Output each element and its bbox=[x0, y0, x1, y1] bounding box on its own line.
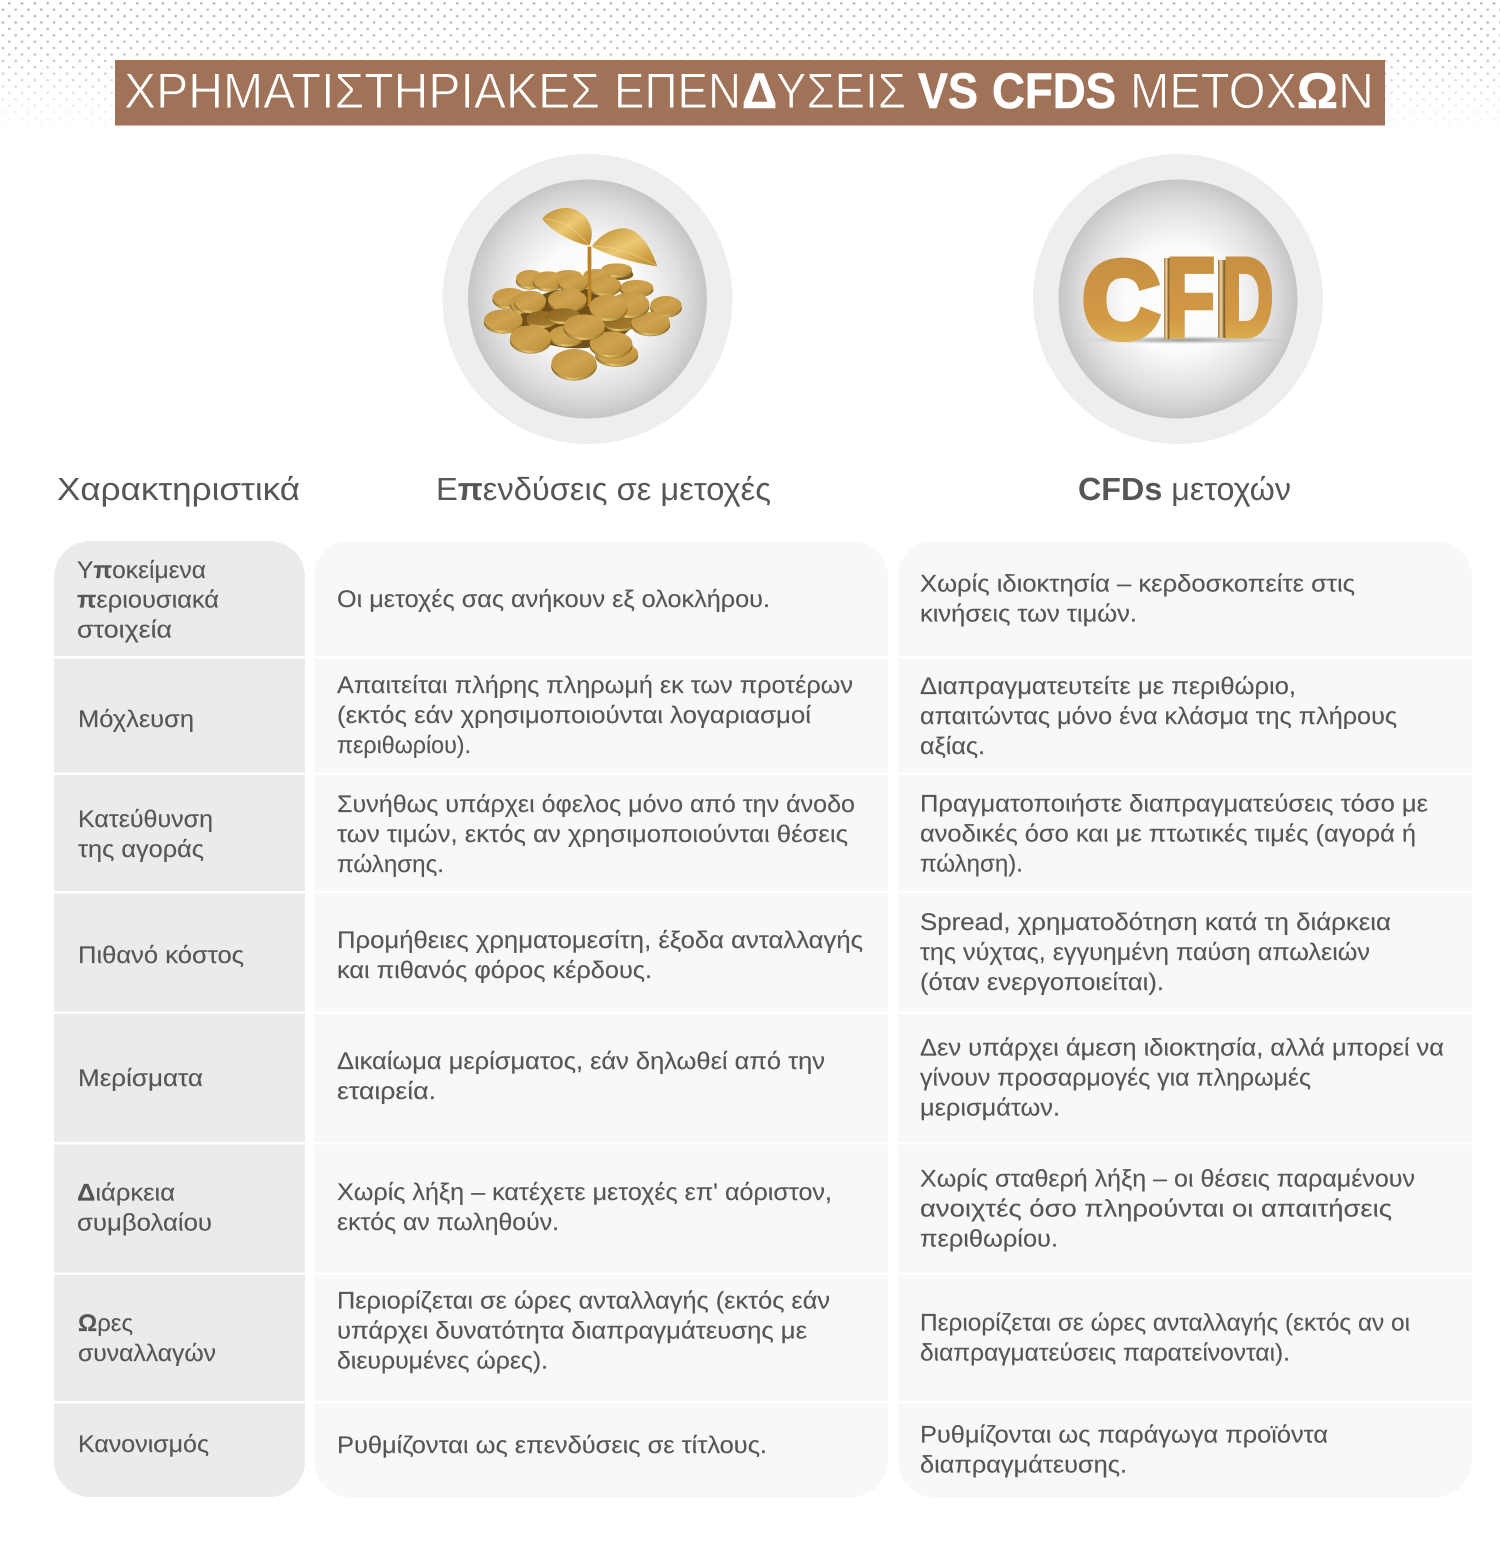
cell: trading hours: Περιορίζεται σε ώρες ανταλλαγής (εκτός εάν bbox=[337, 1288, 830, 1314]
label: trading hours: Ωρες bbox=[78, 1310, 133, 1337]
cell: underlying assets bbox=[920, 570, 1355, 628]
cell: potential cost: της νύχτας, εγγυημένη παύση απωλειών bbox=[920, 939, 1370, 966]
cell: regulation: διαπραγμάτευσης. bbox=[920, 1452, 1127, 1478]
heading: characteristics: Χαρακτηριστικά bbox=[57, 471, 300, 507]
cell: contract duration bbox=[337, 1179, 832, 1236]
label: regulation: Κανονισμός bbox=[78, 1431, 209, 1458]
title banner: Δ bbox=[742, 63, 777, 119]
title banner: Ω bbox=[1297, 63, 1338, 119]
title banner: VS bbox=[918, 63, 978, 119]
label: market direction bbox=[78, 806, 213, 863]
cell: contract duration: εκτός αν πωληθούν. bbox=[337, 1209, 559, 1236]
label: dividends: Μερίσματα bbox=[78, 1065, 203, 1092]
cell: leverage: περιθωρίου). bbox=[337, 732, 471, 759]
label: underlying assets: στοιχεία bbox=[77, 616, 172, 644]
label: leverage: Μόχλευση bbox=[78, 706, 194, 733]
label: market direction: της αγοράς bbox=[78, 836, 204, 863]
label: trading hours bbox=[78, 1310, 216, 1367]
icon: 3D CFD letters: C bbox=[1083, 239, 1159, 360]
cell: dividends bbox=[337, 1048, 825, 1105]
cell: market direction bbox=[920, 790, 1428, 878]
cell: potential cost: και πιθανός φόρος κέρδους. bbox=[337, 957, 652, 984]
title banner: ΕΠΕΝ bbox=[614, 63, 741, 119]
icon: 3D CFD letters bbox=[1033, 154, 1323, 444]
cell: potential cost: (όταν ενεργοποιείται). bbox=[920, 969, 1164, 996]
cell: dividends: μερισμάτων. bbox=[920, 1094, 1060, 1122]
cell: regulation bbox=[920, 1422, 1328, 1478]
title banner: Ν bbox=[1338, 63, 1374, 119]
cell: regulation: Ρυθμίζονται ως επενδύσεις σε τίτλους. bbox=[337, 1432, 767, 1459]
cell: dividends bbox=[920, 1034, 1444, 1122]
title banner: ΥΣΕΙΣ bbox=[776, 63, 906, 119]
cell: contract duration: ανοιχτές όσο πληρούνται οι απαιτήσεις bbox=[920, 1196, 1392, 1222]
cell: trading hours bbox=[920, 1310, 1410, 1366]
title banner: CFDS bbox=[992, 63, 1116, 119]
cell: market direction: Συνήθως υπάρχει όφελος μόνο από την άνοδο bbox=[337, 791, 855, 818]
cell: leverage: αξίας. bbox=[920, 733, 985, 760]
cell: underlying assets: Οι μετοχές σας ανήκουν εξ ολοκλήρου. bbox=[337, 586, 770, 613]
cell: leverage bbox=[920, 673, 1397, 760]
cell: leverage: απαιτώντας μόνο ένα κλάσμα της πλήρους bbox=[920, 703, 1397, 730]
cell: contract duration: περιθωρίου. bbox=[920, 1226, 1058, 1252]
label: potential cost: Πιθανό κόστος bbox=[78, 942, 244, 969]
cell: market direction: ανοδικές όσο και με πτωτικές τιμές (αγορά ή bbox=[920, 820, 1416, 848]
heading: stock CFDs: CFDs μετοχών bbox=[1078, 471, 1291, 507]
panel: stock investments column bbox=[314, 541, 888, 1497]
cell: trading hours: υπάρχει δυνατότητα διαπραγμάτευσης με bbox=[337, 1318, 807, 1344]
cell: dividends: γίνουν προσαρμογές για πληρωμές bbox=[920, 1064, 1311, 1092]
cell: trading hours: Περιορίζεται σε ώρες ανταλλαγής (εκτός αν οι bbox=[920, 1310, 1410, 1336]
cell: contract duration: Χωρίς λήξη – κατέχετε μετοχές επ' αόριστον, bbox=[337, 1179, 832, 1206]
heading: stock investments: Επενδύσεις σε μετοχές bbox=[436, 471, 771, 507]
cell: trading hours: διευρυμένες ώρες). bbox=[337, 1348, 548, 1374]
cell: market direction: πώλησης. bbox=[337, 851, 444, 878]
icon: golden coins with sprout bbox=[442, 154, 732, 444]
cell: market direction: πώληση). bbox=[920, 850, 1023, 878]
cell: regulation: Ρυθμίζονται ως παράγωγα προϊόντα bbox=[920, 1422, 1328, 1448]
cell: potential cost bbox=[337, 927, 863, 984]
label: underlying assets bbox=[77, 557, 219, 644]
title banner: ΧΡΗΜΑΤΙΣΤΗΡΙΑΚΕΣ bbox=[124, 63, 600, 119]
cell: leverage: Απαιτείται πλήρης πληρωμή εκ των προτέρων bbox=[337, 672, 853, 699]
cell: potential cost: Προμήθειες χρηματομεσίτη, έξοδα ανταλλαγής bbox=[337, 927, 863, 954]
label: market direction: Κατεύθυνση bbox=[78, 806, 213, 833]
title banner: ΜΕΤΟΧ bbox=[1130, 63, 1297, 119]
label: contract duration: Διάρκεια bbox=[77, 1180, 175, 1206]
cell: underlying assets: κινήσεις των τιμών. bbox=[920, 600, 1137, 628]
label: trading hours: συναλλαγών bbox=[78, 1340, 216, 1367]
cell: leverage bbox=[337, 672, 853, 759]
label: contract duration: συμβολαίου bbox=[77, 1210, 212, 1236]
cell: potential cost bbox=[920, 909, 1391, 996]
cell: market direction: Πραγματοποιήστε διαπραγματεύσεις τόσο με bbox=[920, 790, 1428, 818]
cell: leverage: Διαπραγματευτείτε με περιθώριο, bbox=[920, 673, 1296, 700]
cell: dividends: Δικαίωμα μερίσματος, εάν δηλωθεί από την bbox=[337, 1048, 825, 1075]
panel: stock CFDs column bbox=[898, 541, 1472, 1497]
icon: 3D CFD letters: D bbox=[1222, 235, 1274, 360]
cell: contract duration: Χωρίς σταθερή λήξη – οι θέσεις παραμένουν bbox=[920, 1166, 1415, 1192]
cell: trading hours bbox=[337, 1288, 830, 1374]
cell: market direction: των τιμών, εκτός αν χρησιμοποιούνται θέσεις bbox=[337, 821, 848, 848]
icon: 3D CFD letters: F bbox=[1166, 235, 1215, 360]
cell: contract duration bbox=[920, 1166, 1415, 1252]
cell: dividends: Δεν υπάρχει άμεση ιδιοκτησία, αλλά μπορεί να bbox=[920, 1034, 1444, 1062]
panel: characteristics column bbox=[54, 541, 305, 1497]
cell: potential cost: Spread, χρηματοδότηση κατά τη διάρκεια bbox=[920, 909, 1391, 936]
label: underlying assets: περιουσιακά bbox=[77, 586, 219, 614]
label: contract duration bbox=[77, 1180, 212, 1236]
cell: leverage: (εκτός εάν χρησιμοποιούνται λογαριασμοί bbox=[337, 702, 812, 729]
cell: trading hours: διαπραγματεύσεις παρατείνονται). bbox=[920, 1340, 1290, 1366]
cell: underlying assets: Χωρίς ιδιοκτησία – κερδοσκοπείτε στις bbox=[920, 570, 1355, 598]
cell: market direction bbox=[337, 791, 855, 878]
title banner bbox=[115, 60, 1385, 126]
label: underlying assets: Υποκείμενα bbox=[77, 557, 206, 584]
cell: dividends: εταιρεία. bbox=[337, 1078, 436, 1105]
